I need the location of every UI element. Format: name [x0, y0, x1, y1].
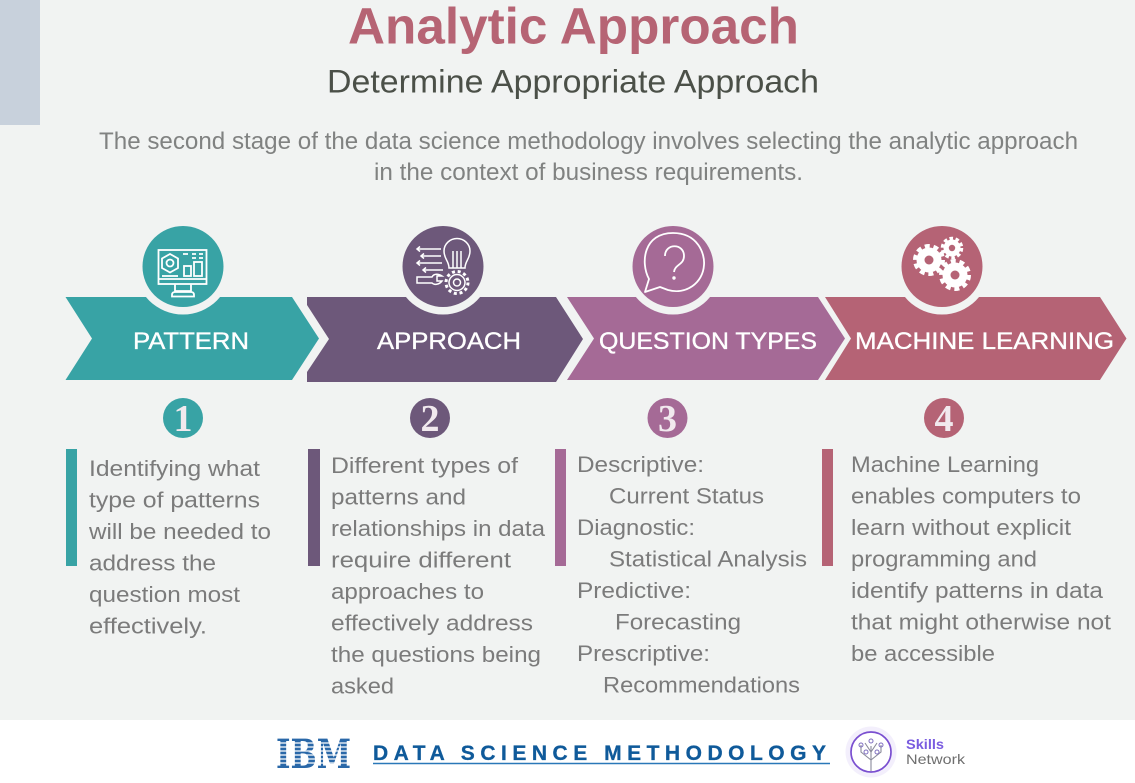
- text block: machine learning: learn without explicit: [851, 515, 1072, 540]
- skills network logo: Network: [906, 751, 966, 767]
- step title: machine learning: MACHINE LEARNING: [855, 328, 1114, 355]
- number badge 4: [924, 398, 964, 440]
- number badge 1: 1: [174, 398, 192, 440]
- accent bar 2: [308, 449, 320, 566]
- text block: question types: [577, 452, 807, 698]
- text block: machine learning: identify patterns in data: [851, 578, 1104, 603]
- icon: gears: [894, 218, 990, 314]
- text block: question types: Forecasting: [615, 610, 741, 634]
- corner accent block: [0, 0, 40, 125]
- intro text: [99, 128, 1078, 186]
- number badge 2: [410, 398, 450, 440]
- text block: question types: Diagnostic:: [577, 515, 695, 540]
- panel: approach: [307, 218, 583, 698]
- icon: question bubble: [625, 218, 721, 314]
- text block: approach: the questions being: [331, 642, 541, 667]
- skills network logo: [846, 726, 966, 778]
- text block: approach: effectively address: [331, 610, 533, 636]
- text block: machine learning: programming and: [851, 546, 1037, 572]
- arrow: question types: [567, 297, 845, 380]
- text block: question types: Recommendations: [603, 672, 800, 698]
- text block: approach: asked: [331, 674, 394, 698]
- intro text: The second stage of the data science methodology involves selecting the analytic approach: [99, 128, 1078, 155]
- text block: machine learning: that might otherwise not: [851, 610, 1112, 634]
- accent bar 1: [66, 449, 77, 566]
- accent bar 4: [822, 449, 833, 566]
- icon: bulb and gear: [395, 218, 491, 314]
- footer title: DATA SCIENCE METHODOLOGY: [373, 742, 826, 765]
- text block: approach: [331, 453, 546, 698]
- text block: question types: Current Status: [609, 484, 764, 508]
- text block: approach: approaches to: [331, 579, 484, 604]
- text block: approach: Different types of: [331, 453, 519, 478]
- step title: approach: APPROACH: [377, 328, 521, 355]
- text block: pattern: effectively.: [89, 614, 207, 638]
- text block: question types: Predictive:: [577, 578, 691, 603]
- skills network logo: Skills: [906, 737, 944, 752]
- panel: question types: [555, 218, 845, 698]
- text block: pattern: type of patterns: [89, 488, 260, 512]
- number badge 3: 3: [658, 398, 677, 440]
- number badge 1: [163, 398, 203, 440]
- text block: question types: Prescriptive:: [577, 641, 710, 666]
- text block: pattern: Identifying what: [89, 456, 261, 481]
- text block: question types: Statistical Analysis: [609, 546, 807, 572]
- panel: machine learning: [822, 218, 1126, 666]
- text block: machine learning: enables computers to: [851, 484, 1081, 508]
- text block: approach: relationships in data: [331, 516, 546, 541]
- step title: pattern: PATTERN: [133, 328, 249, 355]
- text block: pattern: address the: [89, 550, 216, 576]
- accent bar 3: [555, 449, 566, 566]
- number badge 3: [648, 398, 688, 440]
- text block: machine learning: Machine Learning: [851, 452, 1039, 477]
- text block: approach: patterns and: [331, 484, 466, 510]
- arrow: pattern: [66, 297, 319, 380]
- arrow: machine learning: [825, 297, 1126, 380]
- intro text: in the context of business requirements.: [374, 159, 803, 186]
- number badge 4: 4: [934, 398, 954, 440]
- text block: pattern: question most: [89, 582, 241, 607]
- text block: pattern: will be needed to: [88, 519, 271, 544]
- icon: monitor dashboard: [135, 218, 231, 314]
- text block: machine learning: be accessible: [851, 641, 995, 666]
- text block: approach: require different: [331, 548, 512, 572]
- IBM logo: IBM: [276, 731, 351, 778]
- number badge 2: 2: [420, 398, 440, 440]
- text block: machine learning: [851, 452, 1112, 666]
- text block: question types: Descriptive:: [577, 452, 704, 477]
- text block: pattern: [88, 456, 271, 638]
- subtitle: Determine Appropriate Approach: [327, 64, 819, 100]
- panel: pattern: [66, 218, 319, 638]
- arrow: approach: [307, 297, 583, 382]
- step title: question types: QUESTION TYPES: [599, 328, 817, 355]
- footer: [0, 720, 1135, 783]
